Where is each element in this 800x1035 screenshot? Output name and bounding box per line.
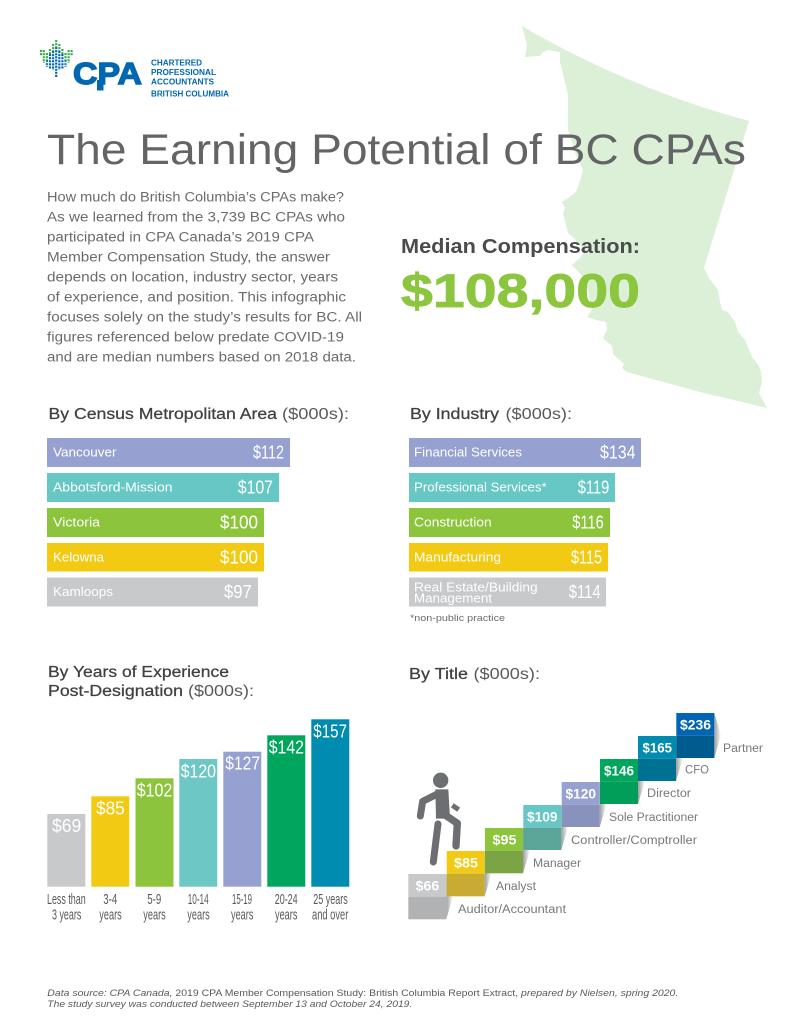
step: Manager: Manager: [533, 858, 581, 870]
bar: Financial Services: $134: [600, 442, 636, 462]
logo text: [151, 58, 229, 98]
column: 10-14 years: years: [187, 906, 210, 924]
step: Controller/Comptroller: [523, 805, 697, 850]
bar: Financial Services: [409, 438, 641, 467]
heading: by industry: ($000s):: [506, 406, 572, 423]
column: 5-9 years: years: [143, 906, 166, 924]
bar: Abbotsford-Mission: [47, 473, 279, 502]
step: CFO: $165: [642, 740, 672, 756]
step: Auditor/Accountant: [408, 874, 567, 919]
logo wordmark: CPA: [73, 56, 142, 91]
column: 3-4 years: $85: [96, 798, 125, 819]
step: Manager: $95: [492, 832, 517, 848]
step: Sole Practitioner: [562, 782, 698, 827]
bar: Real Estate/Building Management: Management: [414, 592, 493, 606]
step: Auditor/Accountant: $66: [416, 878, 440, 894]
column: 5-9 years: $102: [137, 780, 172, 801]
column: less than 3 years: [47, 814, 86, 924]
intro text block: participated in CPA Canada’s 2019 CPA: [47, 230, 315, 246]
column: 15-19 years: [223, 752, 261, 924]
heading: by years of experience: By Years of Experience: [48, 664, 229, 681]
bar: Kelowna: Kelowna: [53, 550, 104, 564]
column: less than 3 years: $69: [52, 815, 81, 836]
heading: by title: By Title: [409, 666, 468, 683]
intro text block: As we learned from the 3,739 BC CPAs who: [47, 210, 345, 226]
step: Director: [600, 759, 691, 804]
heading: by years of experience: ($000s):: [188, 683, 254, 700]
step: Sole Practitioner: Sole Practitioner: [609, 812, 698, 824]
bar: Manufacturing: $115: [571, 546, 602, 568]
bar: Construction: Construction: [414, 516, 492, 530]
heading: by census metropolitan area: ($000s):: [282, 406, 349, 423]
intro text block: of experience, and position. This infographic: [47, 290, 346, 306]
step: Auditor/Accountant: Auditor/Accountant: [458, 904, 567, 916]
intro text block: focuses solely on the study’s results for BC. All: [47, 310, 362, 326]
bar: Abbotsford-Mission: Abbotsford-Mission: [53, 481, 173, 495]
step: Analyst: Analyst: [496, 881, 537, 893]
bar: Abbotsford-Mission: $107: [238, 476, 273, 498]
column: 20-24 years: [267, 735, 305, 924]
title: The Earning Potential of BC CPAs: [47, 126, 746, 174]
heading: by industry: By Industry: [410, 406, 499, 423]
heading: by industry: [410, 406, 572, 423]
column: 10-14 years: 10-14: [188, 891, 209, 908]
column: 25 years and over: 25 years: [313, 891, 348, 908]
column: 20-24 years: $142: [269, 736, 304, 757]
column: less than 3 years: Less than: [47, 891, 86, 908]
bar: Construction: [409, 508, 610, 537]
heading: by census metropolitan area: [48, 406, 349, 423]
panel: census metropolitan area bars: [47, 438, 290, 606]
column: 15-19 years: $127: [225, 752, 260, 773]
column: 3-4 years: [91, 796, 129, 924]
step: Sole Practitioner: $120: [566, 786, 596, 802]
heading: by census metropolitan area: By Census Metropolitan Area: [48, 406, 277, 423]
intro text block: and are median numbers based on 2018 data.: [47, 350, 356, 366]
column: 3-4 years: 3-4: [103, 891, 117, 908]
bar: Professional Services: $119: [578, 476, 609, 498]
bar: Kamloops: $97: [224, 581, 252, 602]
bar: Vancouver: Vancouver: [53, 446, 116, 460]
bar: Kamloops: [47, 578, 258, 606]
callout value: $108,000: [401, 264, 640, 317]
logo text: PROFESSIONAL: [151, 68, 216, 77]
staircase chart: by title: [408, 713, 763, 919]
intro text block: figures referenced below predate COVID-19: [47, 330, 344, 346]
icon: person climbing stairs: [420, 773, 459, 862]
intro text block: [47, 190, 362, 366]
step: Analyst: $85: [454, 856, 479, 870]
bar: Kamloops: Kamloops: [53, 585, 113, 599]
column: 5-9 years: [136, 778, 174, 924]
bar: Professional Services: Professional Services*: [414, 481, 547, 495]
column: 20-24 years: 20-24: [275, 891, 298, 908]
bar: Real Estate/Building Management: Real Estate/Building: [414, 580, 538, 594]
map of British Columbia: [522, 26, 767, 408]
step: Controller/Comptroller: $109: [527, 810, 558, 824]
bar: Financial Services: Financial Services: [414, 446, 522, 460]
intro text block: Member Compensation Study, the answer: [47, 250, 330, 266]
footer: data source: [47, 988, 678, 1010]
step: Controller/Comptroller: Controller/Comptroller: [571, 835, 697, 847]
bar: Kelowna: $100: [220, 546, 258, 568]
footer: data source: The study survey was conducted between September 13 and October 24, 2019.: [47, 999, 412, 1010]
bar: Manufacturing: Manufacturing: [414, 550, 501, 564]
step: Partner: Partner: [723, 743, 763, 755]
footer: data source: Data source: CPA Canada, 2019 CPA Member Compensation Study: British Columbia Report Extract, prepared by Nielsen, spring 2020.: [47, 988, 678, 999]
bar: Real Estate/Building Management: $114: [569, 581, 601, 602]
bar: Construction: $116: [572, 512, 604, 532]
column: 5-9 years: 5-9: [147, 891, 161, 908]
intro text block: depends on location, industry sector, years: [47, 270, 338, 286]
column: 10-14 years: $120: [181, 760, 216, 781]
logo text: ACCOUNTANTS: [151, 77, 215, 86]
bar: Vancouver: $112: [253, 442, 284, 462]
step: Manager: [485, 828, 581, 873]
intro text block: How much do British Columbia’s CPAs make?: [47, 190, 344, 206]
column: 20-24 years: years: [275, 906, 297, 924]
column: 25 years and over: $157: [313, 720, 347, 741]
panel: industry bars: [409, 438, 641, 606]
column: 25 years and over: and over: [312, 906, 348, 924]
bar: Victoria: [47, 508, 264, 537]
footnote: non-public practice: *non-public practice: [410, 613, 505, 624]
logo text: CHARTERED: [151, 58, 202, 68]
column: 3-4 years: years: [99, 906, 122, 924]
step: Director: $146: [604, 764, 634, 778]
step: Director: Director: [647, 788, 691, 800]
heading: by years of experience: [48, 664, 254, 700]
bar: Victoria: $100: [220, 512, 258, 532]
heading: by years of experience: Post-Designation: [48, 683, 183, 700]
column: less than 3 years: 3 years: [52, 906, 81, 924]
column: 15-19 years: years: [231, 906, 253, 924]
step: Analyst: [447, 851, 537, 896]
step: Partner: $236: [680, 718, 711, 732]
bar: Real Estate/Building Management: [409, 578, 606, 606]
bar: Vancouver: [47, 438, 290, 467]
column: 25 years and over: [311, 719, 349, 924]
bar: Kelowna: [47, 543, 264, 572]
bar: Manufacturing: [409, 543, 608, 572]
step: CFO: CFO: [685, 764, 709, 776]
heading: by title: ($000s):: [474, 666, 540, 683]
median compensation callout: [401, 236, 640, 317]
bar: Victoria: Victoria: [53, 516, 100, 530]
logo: CPA British Columbia: [41, 40, 229, 98]
step: CFO: [638, 736, 709, 781]
column: 15-19 years: 15-19: [232, 891, 252, 908]
step: Partner: [676, 713, 763, 758]
bar: Professional Services: [409, 473, 615, 502]
heading: by title: [409, 666, 540, 683]
callout label: Median Compensation:: [401, 236, 640, 258]
bar chart: years of experience: [47, 719, 349, 924]
logo text: BRITISH COLUMBIA: [151, 90, 229, 98]
icon: dotted maple leaf: [41, 40, 72, 77]
column: 10-14 years: [179, 759, 217, 924]
